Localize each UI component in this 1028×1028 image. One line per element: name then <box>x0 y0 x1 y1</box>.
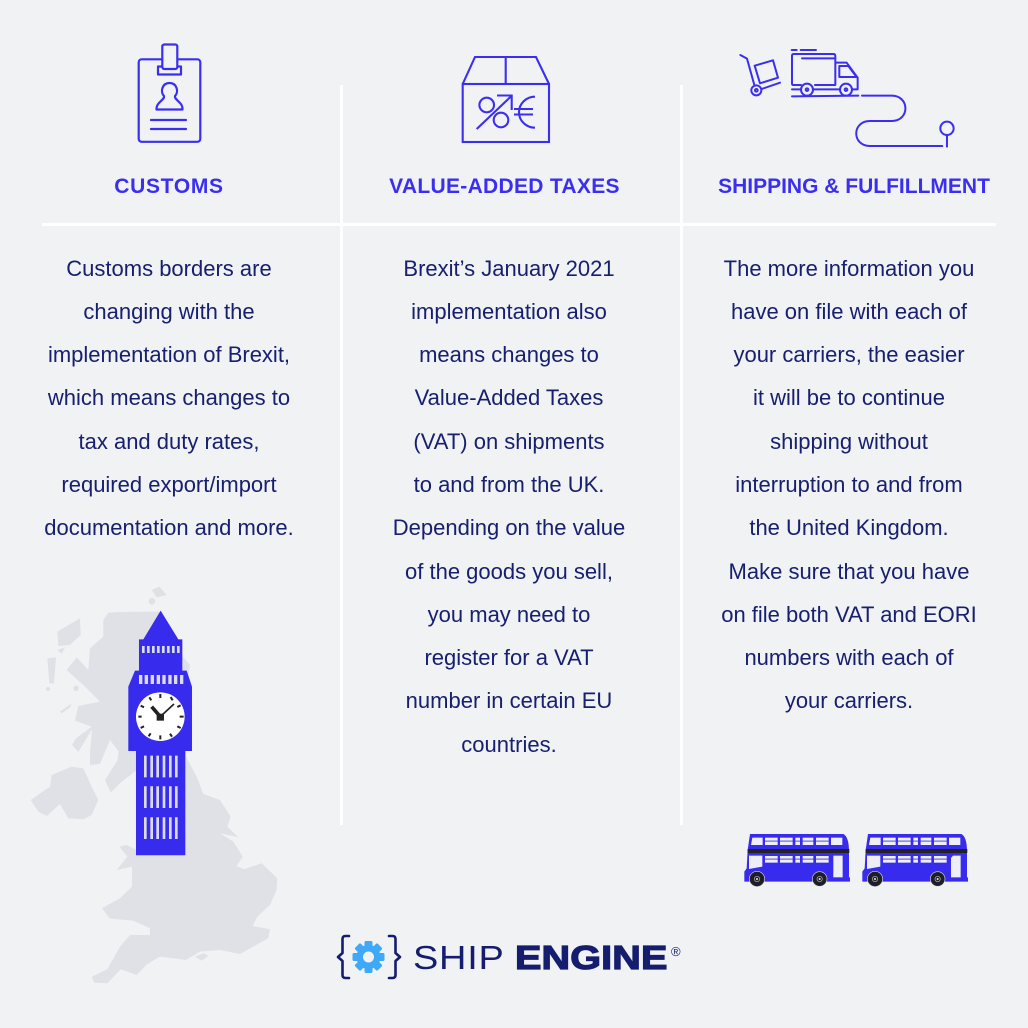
text: shipping and fulfillment body: shipping without <box>770 429 928 454</box>
text: shipping and fulfillment body: your carriers. <box>785 688 913 713</box>
icon: double-decker bus, left <box>744 834 850 887</box>
text: customs body: required export/import <box>61 472 277 497</box>
text: shipping and fulfillment body: Make sure that you have <box>729 559 969 584</box>
text: shipping and fulfillment body: on file both VAT and EORI <box>721 602 977 627</box>
heading: customs: CUSTOMS <box>114 175 224 198</box>
text: value-added taxes body: number in certain EU <box>406 688 612 713</box>
text: value-added taxes body: Depending on the value <box>393 515 625 540</box>
text: value-added taxes body <box>393 256 625 757</box>
text: customs body: changing with the <box>83 299 255 324</box>
text: value-added taxes body: register for a VAT <box>424 645 594 670</box>
logo: ShipEngine <box>338 936 681 978</box>
icon: hand truck, delivery van and route <box>740 50 954 147</box>
text: value-added taxes body: you may need to <box>428 602 590 627</box>
text: shipping and fulfillment body: have on file with each of <box>731 299 967 324</box>
text: customs body: Customs borders are <box>66 256 272 280</box>
text: shipping and fulfillment body: interruption to and from <box>735 472 963 497</box>
text: customs body: tax and duty rates, <box>78 429 260 454</box>
text: value-added taxes body: implementation also <box>411 299 607 324</box>
text: value-added taxes body: to and from the UK. <box>414 472 604 497</box>
text: value-added taxes body: means changes to <box>419 342 599 367</box>
icon: ID badge <box>139 44 200 142</box>
logo: ShipEngine: ENGINE <box>515 939 667 976</box>
text: value-added taxes body: Brexit’s January 2021 <box>403 256 615 280</box>
heading: shipping and fulfillment: SHIPPING & FULFILLMENT <box>718 175 990 198</box>
logo: ShipEngine: ® <box>671 944 681 959</box>
icon: parcel with percent and euro <box>463 57 549 142</box>
map: United Kingdom silhouette <box>31 587 277 983</box>
icon: Big Ben clock tower <box>128 611 192 855</box>
text: shipping and fulfillment body: numbers with each of <box>744 645 954 670</box>
text: shipping and fulfillment body: your carriers, the easier <box>733 342 965 367</box>
logo: ShipEngine: SHIP <box>413 939 504 976</box>
text: value-added taxes body: countries. <box>461 732 557 757</box>
text: value-added taxes body: of the goods you sell, <box>405 559 613 584</box>
heading: value-added taxes: VALUE-ADDED TAXES <box>389 175 620 198</box>
text: value-added taxes body: (VAT) on shipments <box>413 429 605 454</box>
icon: double-decker bus, right <box>862 834 968 887</box>
text: customs body: implementation of Brexit, <box>48 342 290 367</box>
text: shipping and fulfillment body: it will be to continue <box>753 385 945 410</box>
text: customs body: documentation and more. <box>44 515 294 540</box>
text: customs body: which means changes to <box>48 385 290 410</box>
text: shipping and fulfillment body <box>721 256 977 713</box>
text: customs body <box>44 256 294 540</box>
text: shipping and fulfillment body: The more information you <box>724 256 974 280</box>
text: shipping and fulfillment body: the United Kingdom. <box>749 515 949 540</box>
text: value-added taxes body: Value-Added Taxes <box>415 385 603 410</box>
